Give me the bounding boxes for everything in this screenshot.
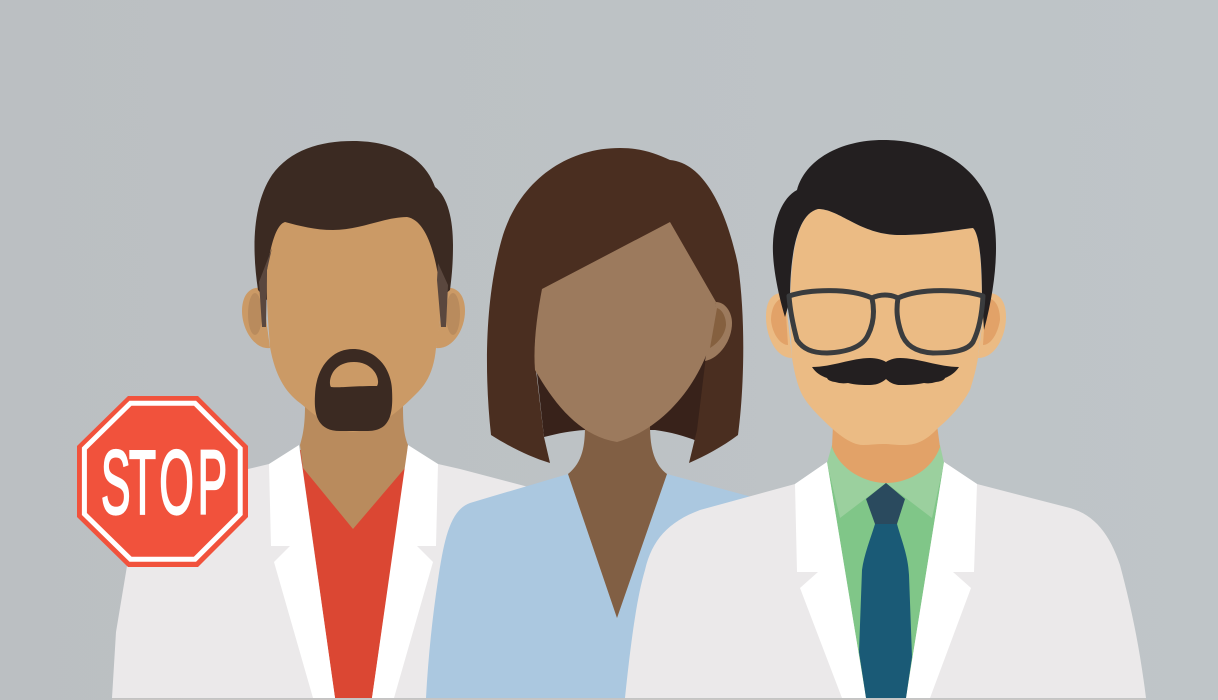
ear detail: left	[248, 293, 262, 335]
figure: woman	[426, 148, 800, 698]
face	[790, 209, 982, 445]
sign border	[84, 403, 240, 559]
figure: left man with goatee	[112, 141, 540, 698]
neck	[568, 425, 667, 618]
hair shadow	[536, 355, 708, 441]
tie knot	[866, 483, 905, 524]
collar	[827, 445, 944, 518]
shirt: green	[827, 462, 944, 698]
lab coat: left man	[112, 464, 540, 698]
glasses	[789, 291, 983, 353]
hair	[255, 141, 453, 300]
ear: right	[436, 288, 465, 348]
neck	[300, 405, 408, 529]
ear: right	[978, 293, 1006, 358]
figure: right man with glasses and moustache	[625, 140, 1146, 698]
sign text: STOP	[101, 432, 227, 534]
lapels: white	[269, 445, 438, 698]
stop sign	[77, 396, 248, 567]
tie	[859, 524, 912, 698]
hair	[487, 148, 743, 463]
ear	[705, 302, 732, 361]
neck	[832, 425, 940, 483]
face	[534, 222, 716, 442]
ear: left	[766, 293, 792, 358]
lab coat: right man	[625, 462, 1146, 698]
ear detail: right	[983, 298, 1000, 345]
hair	[773, 140, 996, 330]
baseline strip	[112, 698, 1146, 700]
ear detail: right	[446, 293, 460, 335]
moustache	[812, 358, 959, 385]
ear detail: left	[771, 298, 788, 345]
blouse	[426, 474, 800, 698]
face	[267, 217, 441, 432]
ear: left	[242, 288, 270, 348]
sideburns	[259, 248, 448, 327]
sign face	[77, 396, 248, 567]
shirt: red	[300, 450, 408, 698]
ear detail	[710, 308, 726, 348]
lapels: white	[795, 462, 977, 698]
goatee	[315, 349, 392, 431]
